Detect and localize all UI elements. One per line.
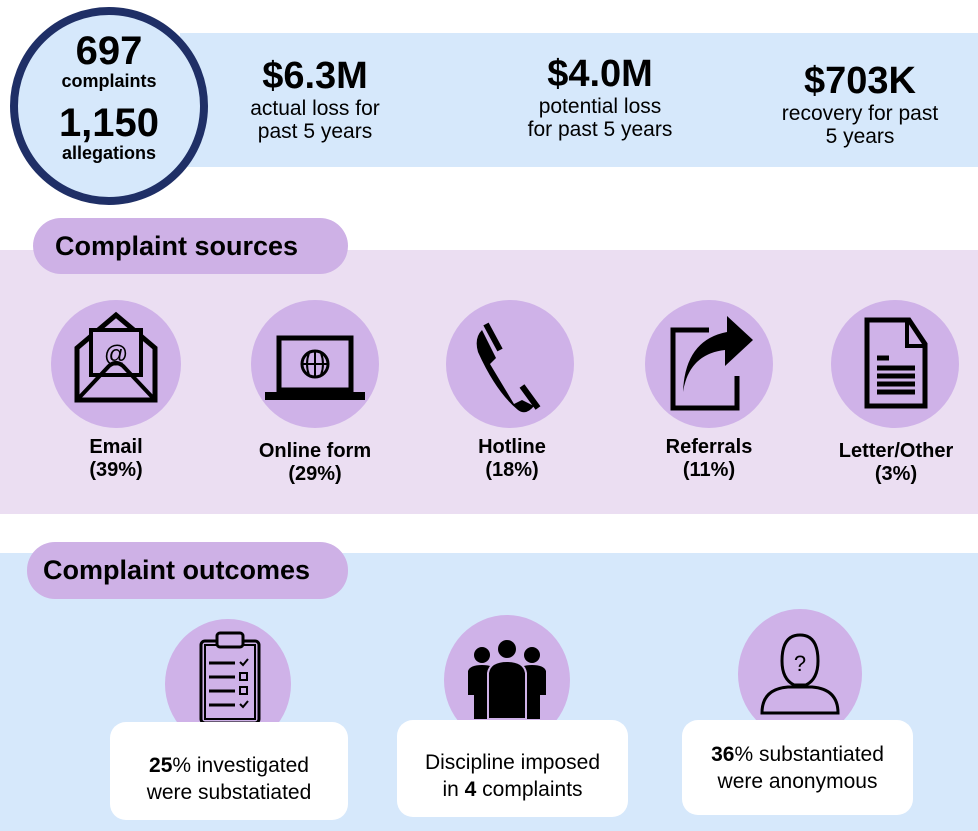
stat: actual loss: past 5 years — [258, 120, 372, 143]
icon: email — [51, 300, 181, 428]
callout: anonymous — [682, 720, 913, 815]
callout: anonymous: were anonymous — [718, 770, 877, 793]
heading: complaint sources: Complaint sources — [55, 231, 298, 261]
label: referrals: Referrals — [666, 436, 752, 458]
icon: anonymous person — [738, 609, 862, 739]
label: letter/other: (3%) — [875, 463, 917, 485]
label: hotline — [478, 436, 546, 481]
label: online form: Online form — [259, 440, 371, 462]
stat: potential loss: $4.0M — [547, 53, 653, 95]
stat: recovery — [782, 60, 938, 148]
heading: complaint outcomes — [27, 542, 348, 599]
icon: referrals — [645, 300, 773, 428]
callout: discipline: Discipline imposed — [425, 751, 600, 774]
label: email — [89, 436, 143, 481]
label: email: Email — [89, 436, 143, 458]
stat: potential loss — [528, 53, 672, 141]
label: referrals: (11%) — [683, 459, 735, 481]
stat: actual loss: actual loss for — [250, 97, 380, 120]
circle: complaints and allegations: complaints — [61, 71, 157, 91]
callout: anonymous: 36% substantiated — [711, 743, 884, 766]
heading: complaint outcomes: Complaint outcomes — [43, 555, 310, 585]
label: letter/other — [839, 440, 953, 485]
icon: group of people — [444, 615, 570, 745]
stat: actual loss — [250, 55, 380, 143]
label: online form — [259, 440, 371, 485]
stat: potential loss: potential loss — [539, 95, 661, 118]
label: email: (39%) — [89, 459, 143, 481]
label: hotline: (18%) — [485, 459, 539, 481]
icon: clipboard — [165, 619, 291, 749]
stat: recovery: 5 years — [826, 125, 894, 148]
panel: complaint sources — [0, 250, 978, 514]
callout: investigated: were substatiated — [147, 781, 311, 804]
circle: complaints and allegations: 697 — [76, 29, 142, 73]
label: online form: (29%) — [288, 463, 342, 485]
circle: complaints and allegations: allegations — [62, 143, 156, 163]
stat: potential loss: for past 5 years — [528, 118, 672, 141]
label: referrals — [666, 436, 752, 481]
icon: hotline — [446, 300, 574, 428]
stat: recovery: recovery for past — [782, 102, 938, 125]
panel: complaint outcomes — [0, 553, 978, 831]
callout: discipline: in 4 complaints — [442, 778, 583, 801]
stat: actual loss: $6.3M — [262, 55, 368, 97]
stat: recovery: $703K — [804, 60, 916, 102]
top stats band — [180, 33, 978, 167]
icon: anonymous person: ? — [794, 651, 806, 676]
icon: letter — [831, 300, 959, 428]
callout: discipline — [397, 720, 628, 817]
icon: email: @ — [104, 341, 128, 368]
label: hotline: Hotline — [478, 436, 546, 458]
icon: online form — [251, 300, 379, 428]
callout: investigated: 25% investigated — [149, 754, 309, 777]
label: letter/other: Letter/Other — [839, 440, 953, 462]
circle: complaints and allegations — [10, 7, 208, 205]
heading: complaint sources — [33, 218, 348, 274]
callout: investigated — [110, 722, 348, 820]
circle: complaints and allegations: 1,150 — [59, 101, 159, 145]
